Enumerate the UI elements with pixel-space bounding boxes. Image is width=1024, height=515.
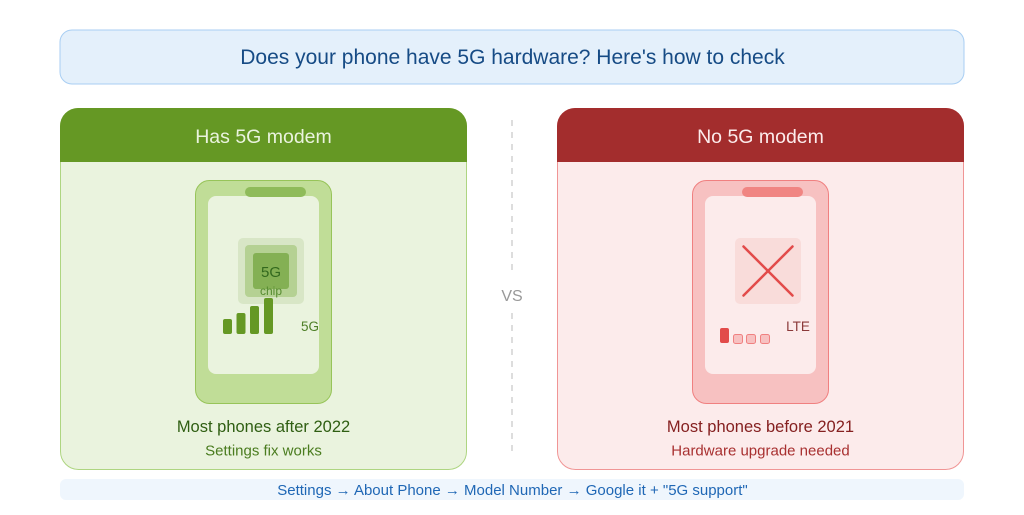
sub caption: no 5G: Hardware upgrade needed <box>671 442 850 460</box>
sub caption: has 5G: Settings fix works <box>205 442 322 460</box>
icon: 5G chip: chip <box>260 284 282 298</box>
footer instruction bar <box>60 479 964 500</box>
title banner: Does your phone have 5G hardware? Here's how to check <box>240 46 785 69</box>
icon: 5G chip: 5G <box>261 264 281 281</box>
signal label: 5G <box>301 319 319 334</box>
panel header: has 5G modem: Has 5G modem <box>195 126 332 148</box>
phone illustration: no 5G <box>692 180 828 404</box>
panel header: has 5G modem <box>60 108 467 162</box>
caption: no 5G: Most phones before 2021 <box>667 418 854 436</box>
panel: has 5G modem <box>60 108 467 470</box>
footer instruction bar: Settings → About Phone → Model Number → Google it + "5G support" <box>277 482 748 499</box>
panel header: no 5G modem: No 5G modem <box>697 126 824 148</box>
icon: crossed out chip <box>735 238 801 304</box>
panel header: no 5G modem <box>557 108 964 162</box>
phone illustration: 5G <box>196 180 332 404</box>
title banner <box>60 30 964 84</box>
icon: full signal bars <box>223 298 273 334</box>
signal label: LTE <box>786 319 810 334</box>
icon: weak signal bars <box>720 328 770 344</box>
panel: no 5G modem <box>557 108 964 470</box>
caption: has 5G: Most phones after 2022 <box>177 418 350 436</box>
divider with VS label: VS <box>501 288 523 305</box>
icon: 5G chip <box>238 238 304 304</box>
